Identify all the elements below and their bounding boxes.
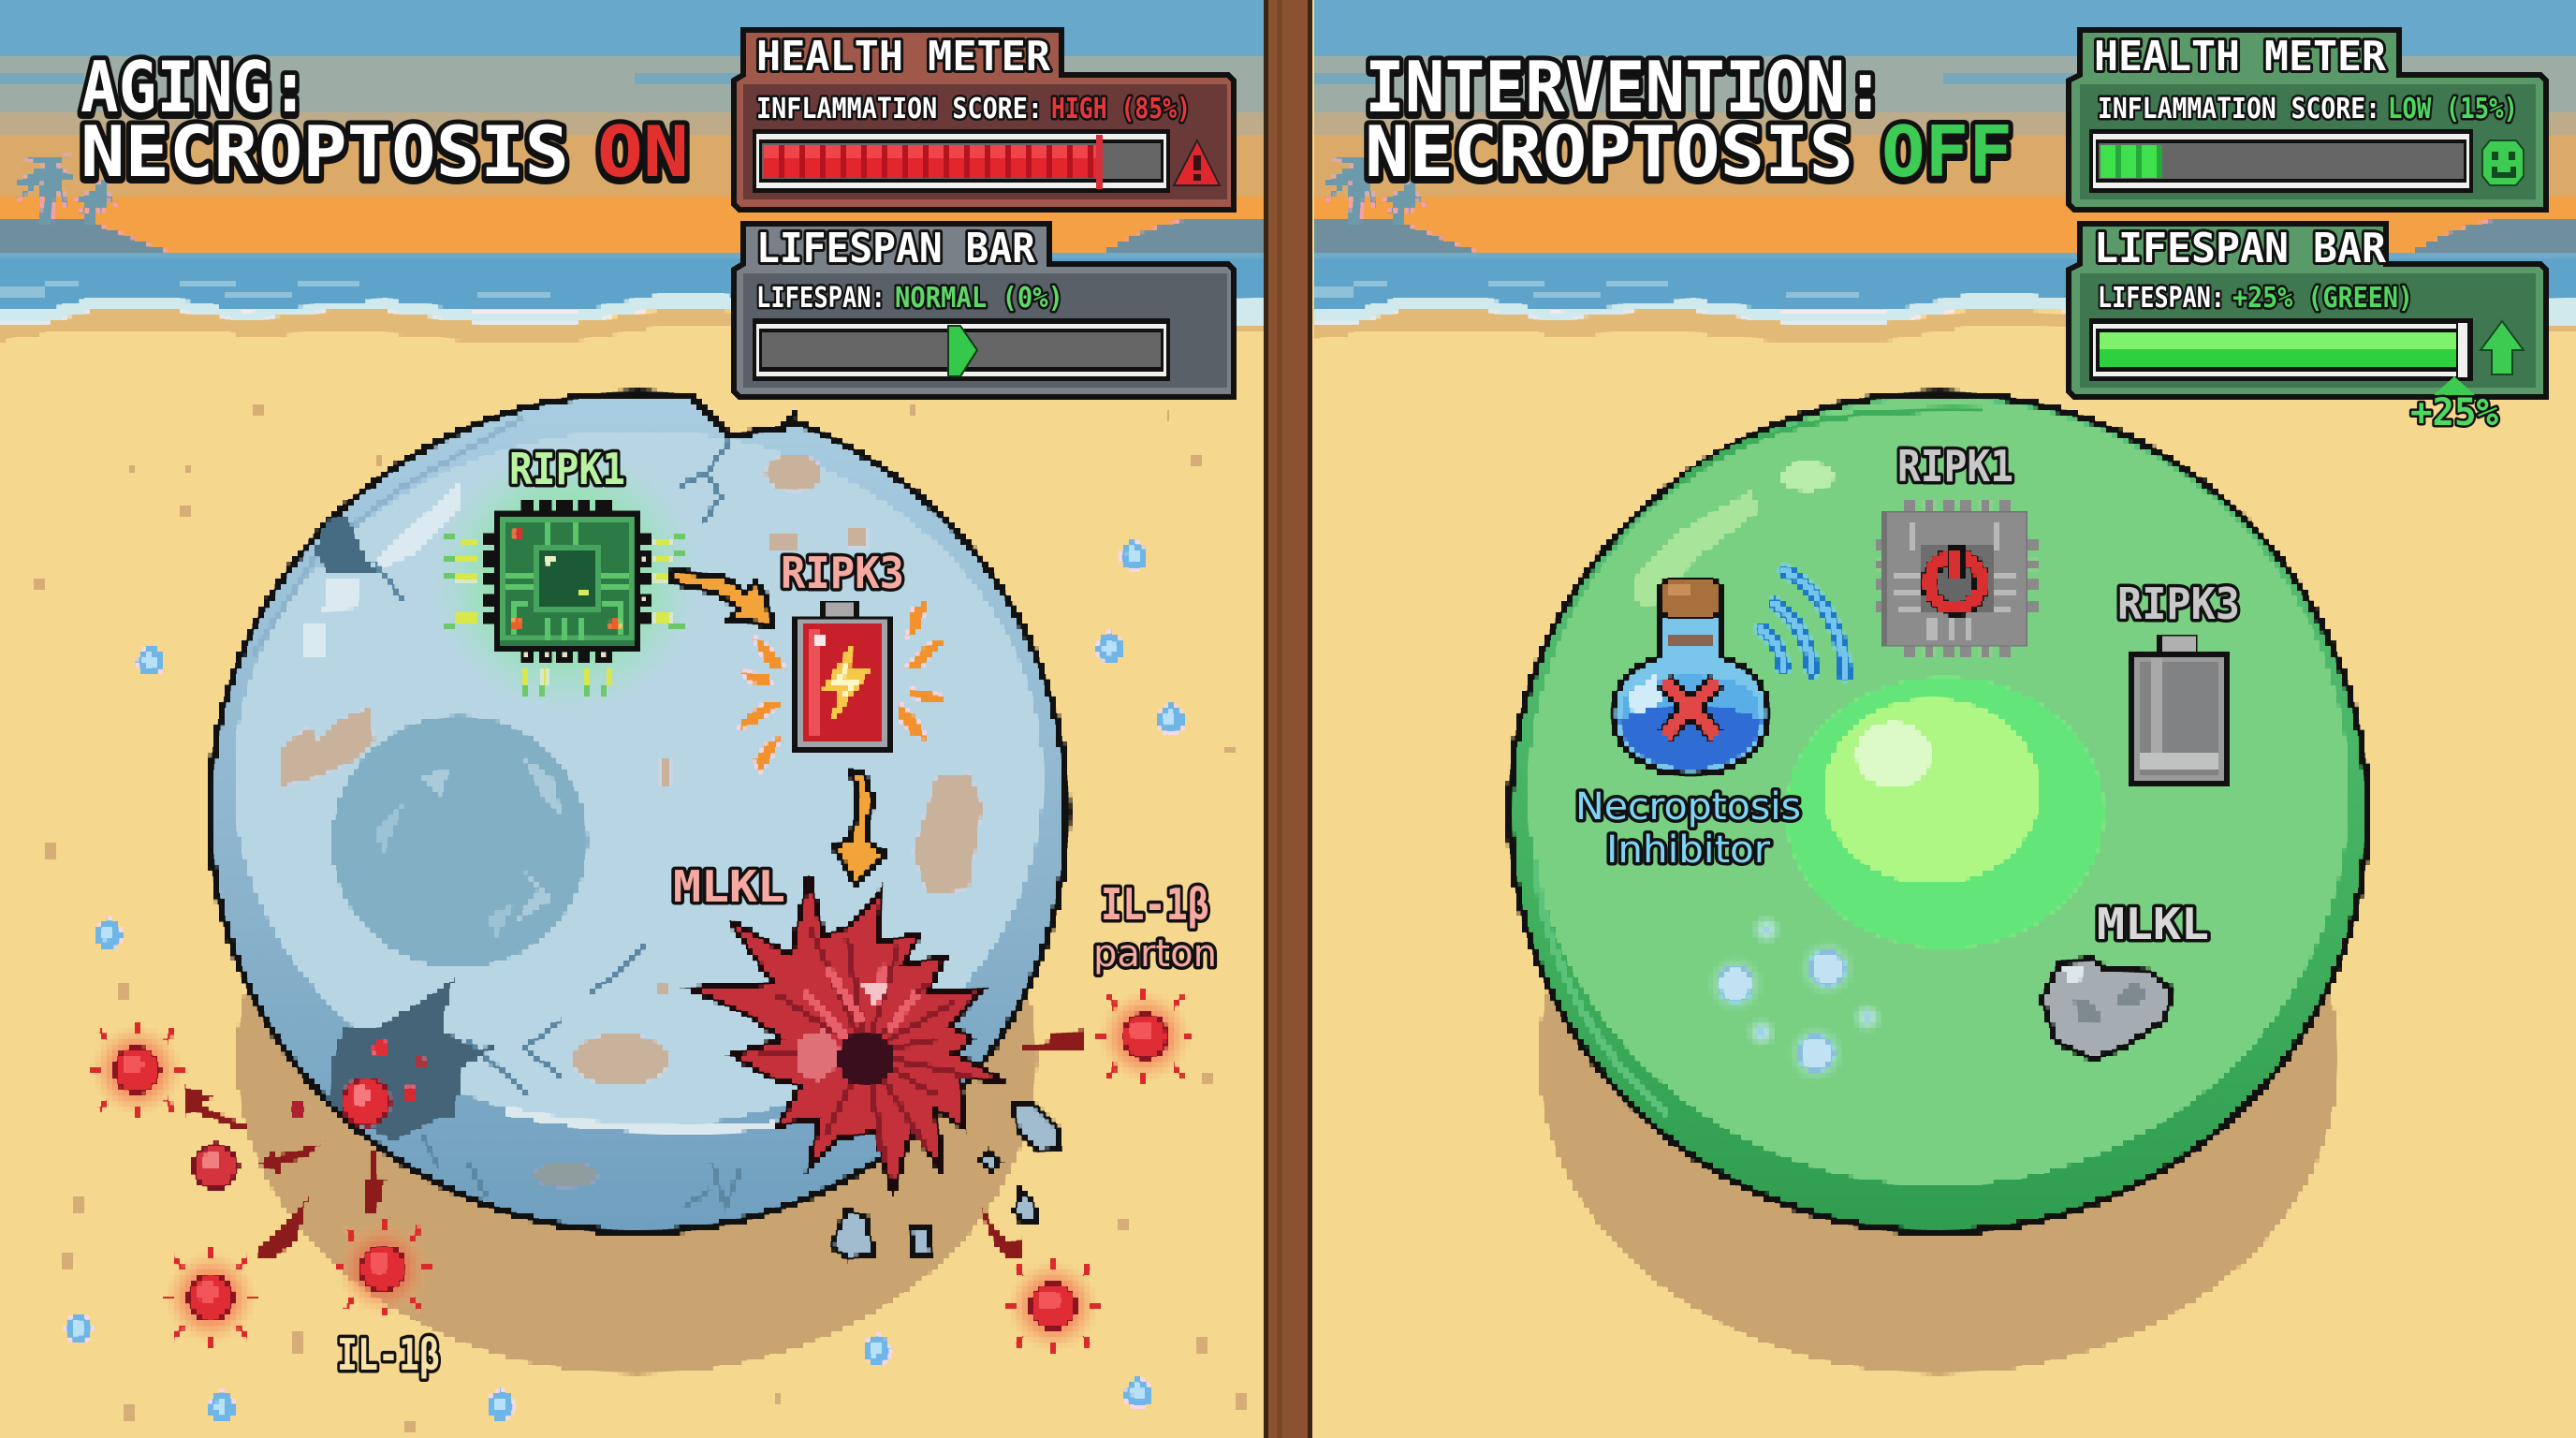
membrane highlights xyxy=(1633,492,1760,609)
scene art: beach and damaged cell xyxy=(0,0,1310,1438)
membrane line xyxy=(505,1110,805,1129)
marker: normal lifespan xyxy=(948,326,977,376)
icon: warning triangle xyxy=(1174,140,1220,185)
health meter labels: aging xyxy=(756,33,1191,125)
lifespan labels: aging xyxy=(756,225,1063,315)
title: aging, necroptosis on: NECROPTOSIS xyxy=(80,110,569,193)
top-left crack xyxy=(314,517,412,604)
bar: lifespan +25% xyxy=(2089,318,2473,381)
icon: RIPK3 charged battery xyxy=(796,602,889,751)
icon: MLKL inert rock xyxy=(2042,960,2173,1060)
ruptured hole xyxy=(289,978,501,1142)
membrane highlights xyxy=(370,483,459,573)
title: intervention, necroptosis off: NECROPTOSIS xyxy=(1365,110,1853,193)
label: necroptosis inhibitor: Necroptosis xyxy=(1575,785,1801,829)
health meter panel: aging xyxy=(734,30,1234,210)
debris rocks xyxy=(831,1103,1061,1259)
scene art: beach and healthy cell xyxy=(1309,0,2576,1438)
title: intervention, necroptosis off: OFF xyxy=(1881,110,2012,193)
arrow: RIPK3 to MLKL xyxy=(834,770,886,885)
water droplets xyxy=(65,539,1185,1421)
sand specks xyxy=(34,403,1245,1434)
label: RIPK1 inactive: RIPK1 xyxy=(1897,441,2013,492)
health meter panel: intervention xyxy=(2069,30,2546,210)
title: aging, necroptosis on: AGING: xyxy=(80,46,309,128)
panel: intervention, necroptosis off xyxy=(1309,0,2576,1438)
label: IL-1β parton xyxy=(1093,879,1217,976)
title: aging, necroptosis on xyxy=(80,46,689,193)
label: necroptosis inhibitor: Inhibitor xyxy=(1606,829,1771,872)
label: IL-1β parton: IL-1β xyxy=(1101,879,1209,930)
lifespan labels: intervention: LIFESPAN BAR xyxy=(2094,225,2386,272)
nucleus xyxy=(331,715,588,968)
chip sparks xyxy=(446,532,683,697)
label: MLKL inactive: MLKL xyxy=(2097,899,2209,949)
icon: necroptosis inhibitor potion xyxy=(1612,579,1769,775)
arrows: IL-1β release xyxy=(183,1030,1084,1260)
lifespan labels: intervention: LIFESPAN: xyxy=(2098,282,2225,315)
tan patches xyxy=(281,707,374,786)
lifespan bar panel: intervention xyxy=(2069,224,2546,397)
cell shadow xyxy=(1538,741,2339,1374)
label: RIPK3 inactive: RIPK3 xyxy=(2117,579,2240,629)
health meter labels: intervention xyxy=(2094,33,2518,125)
label: MLKL active: MLKL xyxy=(673,861,785,912)
label: IL-1β parton: parton xyxy=(1093,932,1217,976)
health meter labels: intervention: LOW (15%) xyxy=(2388,93,2518,125)
icon: inhibitor signal waves xyxy=(1762,571,1845,675)
IL-1β particles xyxy=(88,988,1193,1355)
icon: lifespan pointer xyxy=(2434,376,2475,395)
lifespan labels: aging: LIFESPAN BAR xyxy=(756,225,1035,272)
label: RIPK3 active: RIPK3 xyxy=(781,548,904,598)
icon: smiley xyxy=(2482,140,2524,185)
notch in membrane xyxy=(690,382,796,436)
health meter labels: aging: HEALTH METER xyxy=(756,33,1050,81)
bubbles xyxy=(1707,915,1882,1081)
health meter labels: intervention: INFLAMMATION SCORE: xyxy=(2098,93,2380,125)
label: RIPK1 active: RIPK1 xyxy=(509,444,625,494)
healthy cell xyxy=(1510,393,2367,1232)
lifespan labels: aging: NORMAL (0%) xyxy=(895,282,1063,315)
arrow: RIPK1 to RIPK3 xyxy=(673,571,772,625)
icon: RIPK1 inactive chip xyxy=(1874,502,2037,657)
health meter labels: intervention: HEALTH METER xyxy=(2094,33,2386,81)
label: +25%: +25% xyxy=(2410,391,2498,434)
health meter labels: aging: INFLAMMATION SCORE: xyxy=(756,93,1043,125)
icon: up arrow xyxy=(2481,321,2524,374)
nucleus xyxy=(1786,677,2104,948)
bar: inflammation 85% xyxy=(753,129,1170,193)
icon: RIPK1 active chip xyxy=(433,446,699,712)
label: necroptosis inhibitor xyxy=(1575,785,1801,872)
health meter labels: aging: HIGH (85%) xyxy=(1051,93,1191,125)
lifespan bar panel: aging xyxy=(734,224,1234,397)
beach background xyxy=(1309,0,2576,1438)
MLKL pore star xyxy=(691,874,1007,1194)
bar: lifespan normal xyxy=(753,318,1170,381)
icon: RIPK3 empty battery xyxy=(2132,636,2225,782)
beach background xyxy=(0,0,1310,1438)
divider: wooden post xyxy=(1264,0,1312,1438)
title: intervention, necroptosis off xyxy=(1365,46,2012,193)
lifespan labels: intervention xyxy=(2094,225,2413,315)
battery sparks xyxy=(736,599,947,775)
cracked cell xyxy=(210,382,1067,1232)
lifespan labels: aging: LIFESPAN: xyxy=(756,282,886,315)
top cracks xyxy=(374,440,739,1208)
cell shadow xyxy=(236,741,1037,1374)
title: intervention, necroptosis off: INTERVENTION: xyxy=(1365,46,1885,128)
title: aging, necroptosis on: ON xyxy=(597,110,689,193)
lifespan labels: intervention: +25% (GREEN) xyxy=(2232,282,2413,315)
panel: aging, necroptosis on xyxy=(0,0,1310,1438)
label: IL-1β: IL-1β xyxy=(337,1329,440,1380)
bar: inflammation 15% xyxy=(2089,129,2473,193)
